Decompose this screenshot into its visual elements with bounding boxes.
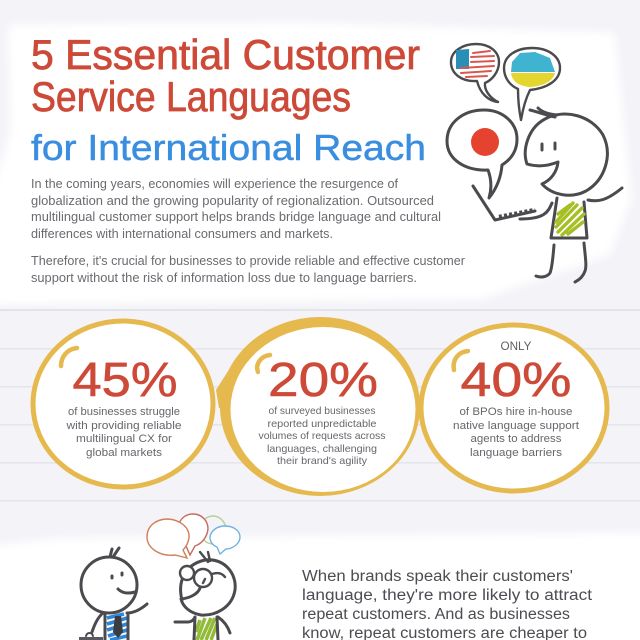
stat description: of businesses struggle [68,406,180,418]
panel: stat 20% [216,317,420,496]
icon: Ukraine flag bubble [504,48,560,120]
stat description: languages, challenging [267,444,377,455]
stat description: language barriers [470,447,563,459]
stat description: global markets [86,447,163,459]
title: for International Reach [31,127,426,168]
figure: speaking person with laptop [473,108,622,282]
panel: stat 40% [421,325,607,491]
text block: repeat customers [302,568,593,640]
intro text block: In the coming years, economies will experience the resurgence of [31,177,399,191]
stat description: multilingual CX for [76,433,172,445]
intro text block: globalization and the growing popularity of regionalization. Outsourced [31,194,434,208]
title: Service Languages [31,73,351,120]
icon: US flag bubble [451,44,499,102]
intro text block: multilingual customer support helps brands bridge language and cultural [31,210,441,224]
text block: repeat customers: repeat customers. And as businesses [302,606,570,623]
stat description: of BPOs hire in-house [460,406,572,418]
text block: repeat customers: language, they're more likely to attract [302,587,593,604]
intro text block: differences with international consumers and markets. [31,227,333,241]
stat number: 45% [72,354,178,407]
label: only: ONLY [500,339,532,353]
panel: stat 45% [33,321,213,487]
figure: man with glasses [175,552,235,640]
stat description: with providing reliable [65,420,182,432]
intro text block [31,177,465,285]
stat description: reported unpredictable [268,419,377,430]
stat description: native language support [453,420,579,432]
stat description [453,406,579,459]
icon: colored speech bubbles [147,514,240,558]
stat description [65,406,182,459]
title [31,31,426,168]
stat description: volumes of requests across [258,431,386,442]
stat description: their brand's agility [277,456,368,467]
intro text block: support without the risk of information loss due to language barriers. [31,271,417,285]
figure: man with tie and briefcase [79,548,147,640]
stat description: of surveyed businesses [268,406,376,417]
illustration: figure with flag speech bubbles [447,44,622,282]
stat description: agents to address [470,433,562,445]
text block: repeat customers: When brands speak their customers' [302,568,573,585]
icon: Japan flag bubble [447,110,517,198]
stat number: 40% [460,354,572,407]
illustration: two people talking with speech bubbles [79,514,240,640]
stat number: 20% [268,354,378,407]
intro text block: Therefore, it's crucial for businesses to provide reliable and effective customer [31,254,465,268]
stat description [258,406,386,467]
title: 5 Essential Customer [31,31,420,78]
